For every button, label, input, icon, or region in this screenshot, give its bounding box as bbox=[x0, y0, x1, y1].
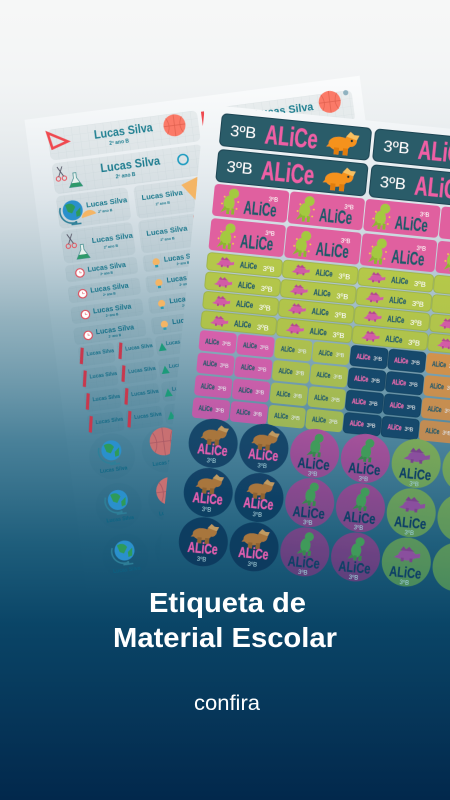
small lime labels: 3ºB bbox=[333, 373, 343, 381]
small orange labels: ALiCe bbox=[427, 404, 442, 414]
right sheet paper bbox=[156, 104, 450, 625]
small lime labels: 3ºB bbox=[331, 396, 340, 404]
dark teal labels with triceratops: 3ºB bbox=[383, 138, 410, 158]
pink labels with t-rex: 3ºB bbox=[416, 245, 426, 253]
small labels with clock and bulb: 2º ano B bbox=[179, 281, 193, 287]
small navy labels: 3ºB bbox=[366, 422, 376, 430]
small labels with clock and bulb: 2º ano B bbox=[106, 312, 119, 318]
small labels with clock and bulb: 2º ano B bbox=[185, 323, 198, 329]
small labels with clock and bulb: Lucas Silva bbox=[164, 252, 203, 264]
lime labels with stegosaurus: 3ºB bbox=[256, 323, 269, 333]
small labels with clock and bulb: Lucas Silva bbox=[166, 273, 206, 285]
pink labels with t-rex: ALiCe bbox=[243, 198, 278, 221]
lime labels with stegosaurus: ALiCe bbox=[238, 279, 256, 291]
pink round labels: ALiCe bbox=[292, 503, 325, 523]
pink labels with t-rex: 3ºB bbox=[268, 196, 278, 204]
lime labels with stegosaurus: 3ºB bbox=[334, 310, 347, 320]
small labels with clock and bulb: 2º ano B bbox=[103, 291, 117, 297]
small lime labels: ALiCe bbox=[316, 370, 331, 380]
pink round labels: 3ºB bbox=[307, 470, 318, 478]
small labels with clock and bulb bbox=[75, 254, 190, 340]
title bbox=[113, 587, 337, 653]
navy round labels bbox=[177, 416, 291, 574]
tiny labels with pencil and triangle: Lucas Silva bbox=[86, 348, 115, 358]
navy round labels: 3ºB bbox=[257, 462, 267, 470]
round labels with globe and basketball: Lucas Silva bbox=[152, 458, 181, 468]
small lime labels: 3ºB bbox=[297, 348, 307, 356]
pink round labels: ALiCe bbox=[287, 553, 320, 573]
small navy labels: 3ºB bbox=[373, 355, 383, 363]
small labels with clock and bulb: 2º ano B bbox=[100, 271, 114, 276]
pink round labels: 3ºB bbox=[353, 524, 364, 532]
pink labels with t-rex: ALiCe bbox=[318, 205, 353, 228]
pink round labels: ALiCe bbox=[297, 454, 330, 474]
small pink labels bbox=[192, 330, 275, 425]
lime labels with stegosaurus: ALiCe bbox=[234, 318, 252, 330]
tiny labels with pencil and triangle: Lucas Silva bbox=[128, 366, 156, 375]
round labels with globe and basketball: Lucas Silva bbox=[113, 566, 141, 575]
small lime labels: ALiCe bbox=[280, 344, 295, 354]
tiny labels with pencil and triangle bbox=[80, 340, 180, 433]
small pink labels: ALiCe bbox=[238, 385, 253, 395]
small labels with clock and bulb: Lucas Silva bbox=[95, 324, 135, 336]
small pink labels: 3ºB bbox=[222, 340, 231, 348]
small labels with clock and bulb: Lucas Silva bbox=[87, 262, 126, 274]
dark teal labels with triceratops: 3ºB bbox=[226, 159, 253, 178]
lime labels with stegosaurus: 3ºB bbox=[260, 284, 273, 294]
tiny labels with pencil and triangle: Lucas Silva bbox=[166, 338, 194, 347]
green round labels: ALiCe bbox=[398, 464, 432, 485]
lime labels with stegosaurus: ALiCe bbox=[309, 326, 327, 337]
medium labels: 2º ano B bbox=[155, 201, 170, 206]
small lime labels bbox=[267, 337, 351, 432]
navy round labels: ALiCe bbox=[243, 494, 274, 514]
green round labels: ALiCe bbox=[388, 563, 422, 583]
small pink labels: 3ºB bbox=[253, 411, 263, 418]
left sheet paper with label blanks bbox=[24, 76, 422, 596]
small pink labels: ALiCe bbox=[203, 358, 217, 369]
tiny labels with pencil and triangle: Lucas Silva bbox=[169, 361, 197, 370]
round labels with globe and basketball: Lucas Silva bbox=[159, 508, 187, 518]
green round labels: 3ºB bbox=[409, 480, 419, 488]
navy round labels: 3ºB bbox=[201, 506, 212, 514]
lime labels with stegosaurus: 3ºB bbox=[258, 303, 271, 313]
small labels with clock and bulb: Lucas Silva bbox=[93, 304, 132, 316]
dark teal labels with triceratops: ALiCe bbox=[264, 119, 319, 155]
lime labels with stegosaurus: 3ºB bbox=[262, 264, 275, 274]
small navy labels: 3ºB bbox=[411, 359, 421, 367]
small navy labels: ALiCe bbox=[387, 422, 402, 432]
pink labels with t-rex bbox=[208, 184, 450, 280]
lime labels with stegosaurus: ALiCe bbox=[236, 298, 254, 310]
large labels: Lucas Silva bbox=[254, 101, 315, 121]
small labels with clock and bulb: Lucas Silva bbox=[169, 293, 208, 305]
small navy labels: ALiCe bbox=[356, 352, 371, 362]
large labels: Lucas Silva bbox=[93, 122, 154, 142]
lime labels with stegosaurus: 3ºB bbox=[412, 299, 424, 309]
tiny labels with pencil and triangle: Lucas Silva bbox=[131, 389, 159, 398]
lime labels with stegosaurus: ALiCe bbox=[315, 267, 333, 279]
small pink labels: ALiCe bbox=[198, 403, 213, 414]
navy round labels: 3ºB bbox=[196, 556, 207, 564]
navy round labels: 3ºB bbox=[252, 511, 262, 519]
navy round labels: ALiCe bbox=[238, 544, 269, 564]
small pink labels: ALiCe bbox=[236, 407, 251, 417]
pink labels with t-rex: 3ºB bbox=[265, 230, 275, 238]
small navy labels: ALiCe bbox=[389, 400, 404, 410]
small lime labels: 3ºB bbox=[295, 370, 305, 377]
pink round labels: 3ºB bbox=[303, 519, 313, 527]
medium labels bbox=[58, 177, 206, 261]
navy round labels: ALiCe bbox=[192, 489, 223, 509]
pink labels with t-rex: ALiCe bbox=[239, 232, 274, 255]
small pink labels: 3ºB bbox=[255, 389, 265, 397]
small orange labels: ALiCe bbox=[425, 426, 440, 436]
large labels: Lucas Silva bbox=[100, 154, 161, 175]
title: Material Escolar bbox=[113, 622, 337, 653]
small lime labels: ALiCe bbox=[278, 366, 293, 376]
small navy labels: 3ºB bbox=[371, 377, 381, 385]
small labels with clock and bulb: Lucas Silva bbox=[90, 283, 129, 295]
small orange labels bbox=[418, 353, 450, 448]
lime labels with stegosaurus: ALiCe bbox=[311, 306, 329, 318]
dark teal labels with triceratops bbox=[216, 114, 450, 211]
small navy labels: 3ºB bbox=[409, 381, 418, 389]
green round labels bbox=[380, 437, 450, 594]
large labels bbox=[47, 88, 356, 189]
pink round labels: 3ºB bbox=[358, 475, 368, 483]
lime labels with stegosaurus: 3ºB bbox=[410, 318, 422, 328]
small navy labels: 3ºB bbox=[406, 404, 416, 412]
small lime labels: 3ºB bbox=[329, 418, 338, 426]
lime labels with stegosaurus: ALiCe bbox=[313, 287, 331, 299]
round labels with globe and basketball: Lucas Silva bbox=[100, 465, 128, 475]
small labels with clock and bulb: Lucas Silva bbox=[172, 314, 211, 326]
small navy labels: 3ºB bbox=[369, 400, 378, 408]
call to action: confira: confira bbox=[194, 692, 260, 715]
small pink labels: ALiCe bbox=[200, 381, 215, 392]
green round labels: ALiCe bbox=[393, 513, 427, 533]
small pink labels: 3ºB bbox=[260, 344, 269, 352]
pink round labels: ALiCe bbox=[338, 558, 371, 578]
small pink labels: ALiCe bbox=[240, 362, 255, 372]
medium labels: 2º ano B bbox=[104, 244, 119, 250]
medium labels: Lucas Silva bbox=[141, 188, 184, 202]
lime labels with stegosaurus: ALiCe bbox=[391, 275, 409, 286]
tiny labels with pencil and triangle: Lucas Silva bbox=[175, 406, 203, 416]
small pink labels: ALiCe bbox=[205, 336, 220, 347]
small lime labels: ALiCe bbox=[276, 389, 291, 399]
pink round labels: 3ºB bbox=[348, 574, 359, 582]
lime labels with stegosaurus: ALiCe bbox=[389, 295, 407, 306]
navy round labels: ALiCe bbox=[247, 445, 279, 465]
medium labels: Lucas Silva bbox=[86, 195, 128, 209]
lime labels with stegosaurus: 3ºB bbox=[332, 330, 345, 340]
small lime labels: ALiCe bbox=[318, 348, 333, 358]
small lime labels: 3ºB bbox=[291, 414, 300, 422]
small lime labels: ALiCe bbox=[274, 411, 289, 421]
tiny labels with pencil and triangle: Lucas Silva bbox=[89, 371, 118, 381]
small pink labels: 3ºB bbox=[217, 385, 227, 393]
medium labels: 2º ano B bbox=[98, 208, 113, 214]
lime labels with stegosaurus: 3ºB bbox=[338, 271, 351, 282]
pink labels with t-rex: ALiCe bbox=[315, 239, 350, 262]
pink round labels: 3ºB bbox=[298, 569, 308, 577]
round labels with globe and basketball bbox=[98, 427, 172, 573]
tiny labels with pencil and triangle: Lucas Silva bbox=[125, 343, 153, 353]
lime labels with stegosaurus: ALiCe bbox=[385, 333, 403, 345]
dark teal labels with triceratops: 3ºB bbox=[379, 174, 407, 194]
small navy labels: ALiCe bbox=[349, 418, 364, 429]
pink labels with t-rex: 3ºB bbox=[344, 204, 354, 212]
small pink labels: ALiCe bbox=[243, 340, 257, 351]
lime labels with stegosaurus bbox=[201, 252, 450, 358]
small lime labels: 3ºB bbox=[335, 351, 345, 359]
tiny labels with pencil and triangle: Lucas Silva bbox=[134, 411, 162, 421]
tiny labels with pencil and triangle: Lucas Silva bbox=[172, 383, 200, 393]
lime labels with stegosaurus: ALiCe bbox=[387, 313, 405, 325]
navy round labels: 3ºB bbox=[206, 457, 216, 465]
small lime labels: 3ºB bbox=[293, 392, 303, 400]
small labels with clock and bulb: 2º ano B bbox=[108, 333, 122, 339]
large labels: 2º ano B bbox=[109, 138, 130, 147]
large labels: 2º ano B bbox=[115, 172, 136, 180]
small navy labels: ALiCe bbox=[394, 355, 409, 366]
navy round labels: 3ºB bbox=[247, 561, 257, 569]
small lime labels: ALiCe bbox=[312, 414, 326, 425]
lime labels with stegosaurus: 3ºB bbox=[408, 338, 420, 348]
left sheet artwork: Lucas Silva bbox=[45, 90, 348, 573]
tiny labels with pencil and triangle: Lucas Silva bbox=[92, 394, 121, 403]
small pink labels: 3ºB bbox=[257, 366, 267, 374]
pink round labels: ALiCe bbox=[348, 459, 381, 479]
tiny labels with pencil and triangle: Lucas Silva bbox=[95, 417, 124, 426]
right sheet artwork: Alice bbox=[177, 113, 450, 594]
small pink labels: 3ºB bbox=[220, 362, 229, 370]
green round labels: 3ºB bbox=[404, 529, 414, 537]
medium labels: 2º ano B bbox=[160, 236, 175, 242]
round labels with globe and basketball: Lucas Silva bbox=[106, 515, 135, 525]
dark teal labels with triceratops: ALiCe bbox=[260, 155, 316, 190]
lime labels with stegosaurus: 3ºB bbox=[414, 279, 426, 289]
lime labels with stegosaurus: 3ºB bbox=[336, 291, 349, 301]
dark teal labels with triceratops: 3ºB bbox=[229, 123, 257, 142]
lime labels with stegosaurus: ALiCe bbox=[240, 260, 258, 271]
green round labels: 3ºB bbox=[399, 579, 409, 587]
small navy labels bbox=[343, 345, 426, 440]
small navy labels: ALiCe bbox=[392, 377, 407, 388]
small navy labels: ALiCe bbox=[354, 373, 369, 384]
pink labels with t-rex: ALiCe bbox=[391, 247, 425, 270]
pink round labels: ALiCe bbox=[343, 508, 376, 528]
pink labels with t-rex: 3ºB bbox=[420, 211, 430, 219]
title: Etiqueta de bbox=[149, 587, 306, 618]
small labels with clock and bulb: 2º ano B bbox=[182, 302, 196, 308]
pink round labels bbox=[278, 427, 392, 584]
navy round labels: ALiCe bbox=[197, 440, 228, 460]
small pink labels: 3ºB bbox=[215, 407, 225, 415]
small navy labels: 3ºB bbox=[404, 426, 414, 434]
small lime labels: ALiCe bbox=[314, 393, 329, 403]
medium labels: Lucas Silva bbox=[146, 223, 189, 238]
medium labels: Lucas Silva bbox=[91, 231, 134, 245]
pink labels with t-rex: ALiCe bbox=[394, 213, 429, 236]
navy round labels: ALiCe bbox=[187, 539, 218, 559]
small labels with clock and bulb: 2º ano B bbox=[176, 260, 190, 266]
small navy labels: ALiCe bbox=[352, 396, 366, 407]
pink labels with t-rex: 3ºB bbox=[341, 237, 351, 245]
